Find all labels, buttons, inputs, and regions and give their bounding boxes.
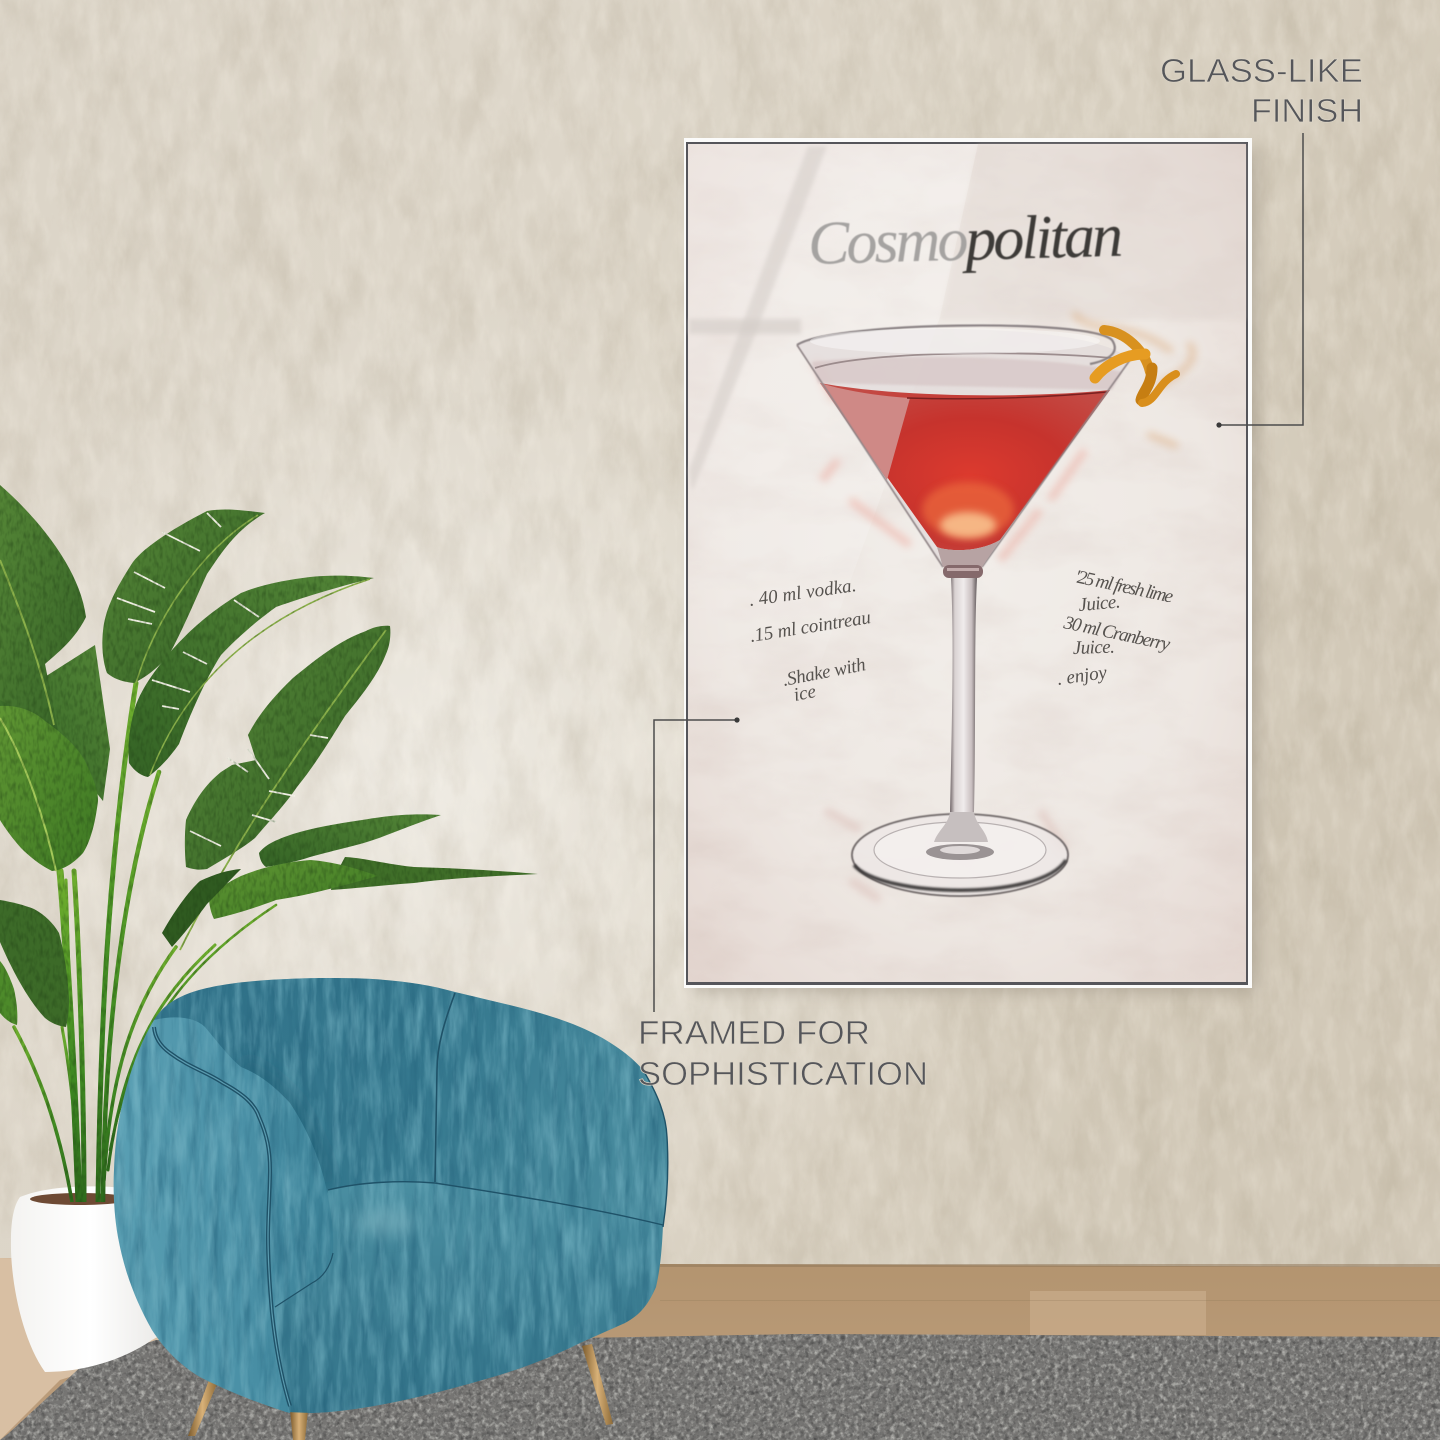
right recipe notes: '25 ml fresh lime xyxy=(1073,566,1175,608)
right recipe notes: 30 ml Cranberry xyxy=(1061,612,1173,655)
front left big leaf xyxy=(0,706,98,871)
callout line: framed for sophistication xyxy=(654,717,740,1012)
chair piping and seams xyxy=(154,993,668,1406)
right recipe notes: . enjoy xyxy=(1056,662,1109,690)
left recipe notes: ice xyxy=(792,681,818,706)
left recipe notes: . 40 ml vodka. xyxy=(748,575,858,611)
glass collar xyxy=(937,540,1000,578)
large diagonal leaf xyxy=(180,626,390,950)
callout text: framed for sophistication: SOPHISTICATION xyxy=(638,1055,928,1092)
glass foot xyxy=(852,812,1068,896)
glass stem xyxy=(950,578,977,812)
left recipe notes: .15 ml cointreau xyxy=(748,607,872,647)
plant xyxy=(0,485,538,1202)
second upper leaf xyxy=(129,576,374,777)
poster title: Cosmopolitan: Cosmopolitan xyxy=(807,202,1124,278)
orange twist garnish xyxy=(1075,315,1193,445)
pink watercolor splashes xyxy=(815,360,1085,900)
right recipe notes xyxy=(1056,566,1175,690)
lower right leaves xyxy=(162,814,538,947)
callout text: glass-like finish xyxy=(1160,52,1363,129)
back left leaf lower xyxy=(0,640,110,801)
shadow behind arm xyxy=(241,1067,326,1187)
top centre leaf xyxy=(102,510,265,683)
left recipe notes xyxy=(748,575,872,706)
callout line: glass-like finish xyxy=(1216,133,1303,428)
lower left leaves xyxy=(0,900,69,1027)
callout text: framed for sophistication: FRAMED FOR xyxy=(638,1014,870,1051)
callout text: glass-like finish: FINISH xyxy=(1251,92,1363,129)
poster art paper xyxy=(688,144,1246,982)
framed poster xyxy=(684,138,1258,992)
right recipe notes: Juice. xyxy=(1072,637,1115,659)
glass bowl xyxy=(797,329,1130,567)
chair legs xyxy=(188,1344,613,1440)
chair arm xyxy=(114,1017,333,1413)
callout text: framed for sophistication xyxy=(638,1014,928,1092)
chair back xyxy=(154,978,668,1227)
teal velvet armchair xyxy=(114,978,668,1413)
white plant pot xyxy=(11,1186,170,1372)
right recipe notes: Juice. xyxy=(1078,591,1121,616)
glass rim xyxy=(797,325,1130,567)
left recipe notes: .Shake with xyxy=(781,654,867,691)
plant stems xyxy=(14,683,276,1202)
cocktail glass illustration xyxy=(797,315,1193,900)
wooden floor xyxy=(0,1258,1440,1440)
grey shag rug xyxy=(0,1334,1440,1440)
top left leaf xyxy=(0,485,86,730)
cocktail liquid xyxy=(812,357,1122,550)
callout text: glass-like finish: GLASS-LIKE xyxy=(1160,52,1363,89)
chair seat xyxy=(270,1182,663,1413)
